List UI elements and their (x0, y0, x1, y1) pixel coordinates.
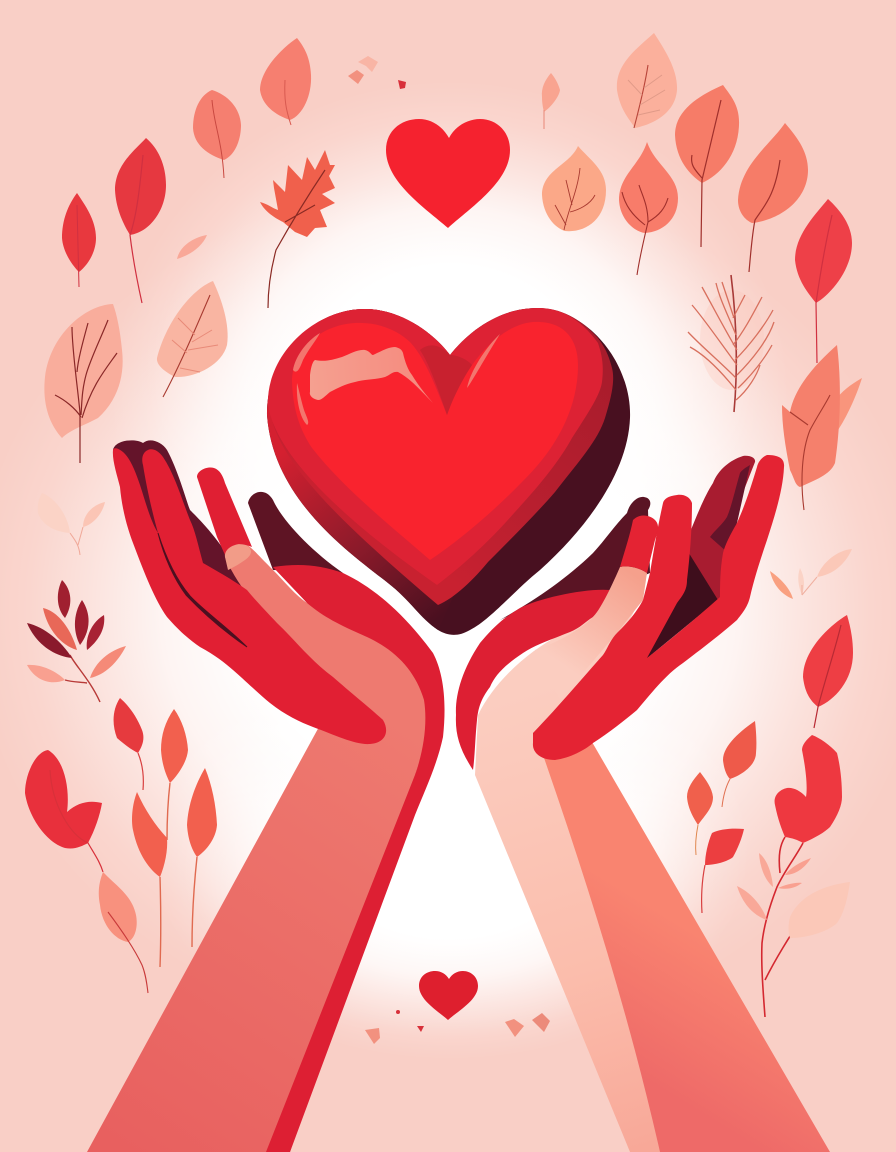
pale leaf (157, 281, 228, 397)
bottom small heart (419, 971, 478, 1020)
leaf (795, 199, 852, 363)
right inner dark back finger (710, 465, 750, 552)
right arm and hand (456, 455, 830, 1152)
right crimson back fingers (684, 456, 755, 605)
heart front face (292, 322, 578, 560)
small leaf top (542, 73, 560, 129)
pale large leaf (617, 33, 677, 128)
heart cleft band (420, 345, 472, 415)
pale leaves cluster (737, 853, 850, 938)
top heart (386, 119, 510, 228)
leaf cluster 2 (161, 709, 188, 840)
right dark back hand (500, 497, 650, 620)
leaf (619, 142, 678, 275)
right thumb (535, 566, 647, 700)
leaf 2 (115, 138, 166, 303)
small falling leaf (177, 235, 207, 259)
right ring finger (620, 515, 658, 573)
small leaf (687, 772, 713, 855)
leaf cluster 3 (132, 792, 167, 967)
leaf (542, 146, 606, 231)
small heart fragments (348, 56, 550, 1044)
leaf (738, 123, 808, 272)
right red band (456, 590, 610, 770)
heart highlight slivers (293, 333, 500, 425)
fern leaf (688, 275, 774, 412)
maple leaf (260, 150, 335, 308)
right pale arm (475, 568, 680, 1152)
left thumb (225, 542, 350, 680)
right palm and fingers (533, 455, 784, 760)
heart dark shadow (267, 308, 630, 635)
leaf low left (99, 872, 148, 993)
large irregular leaf (782, 345, 862, 510)
left arm (87, 600, 440, 1152)
leaf cluster 4 (187, 768, 217, 947)
leaf (803, 615, 853, 728)
left dark back finger (248, 492, 343, 573)
heart outer left gradient (267, 309, 470, 630)
big heart (267, 308, 630, 635)
right leaves (542, 33, 862, 1017)
leaf (675, 85, 739, 247)
right dark palm interior (645, 550, 718, 660)
heart highlight main (310, 347, 433, 403)
pale pair (38, 493, 105, 555)
left index finger (197, 467, 252, 555)
red two-lobed leaf with stem (25, 750, 103, 872)
leaf 1 (62, 193, 96, 287)
left palm crease (158, 533, 247, 647)
left leaves (25, 38, 335, 993)
small leaf (722, 721, 756, 807)
leaf 4 (260, 38, 311, 125)
red leaf with long stem (762, 735, 842, 1017)
leaf 3 (193, 90, 241, 178)
branch with leaves (27, 580, 126, 702)
right salmon arm (543, 742, 830, 1152)
heart crimson layer (272, 308, 613, 605)
small leaf (702, 829, 744, 913)
pale sprigs (770, 549, 852, 599)
left dark behind fingers (113, 440, 257, 603)
leaf cluster 1 (114, 698, 143, 790)
heart rim layer (268, 308, 603, 585)
big pale leaf (44, 304, 123, 463)
left palm (113, 448, 386, 744)
left arm and hand (87, 440, 445, 1152)
left red band (266, 565, 445, 1152)
